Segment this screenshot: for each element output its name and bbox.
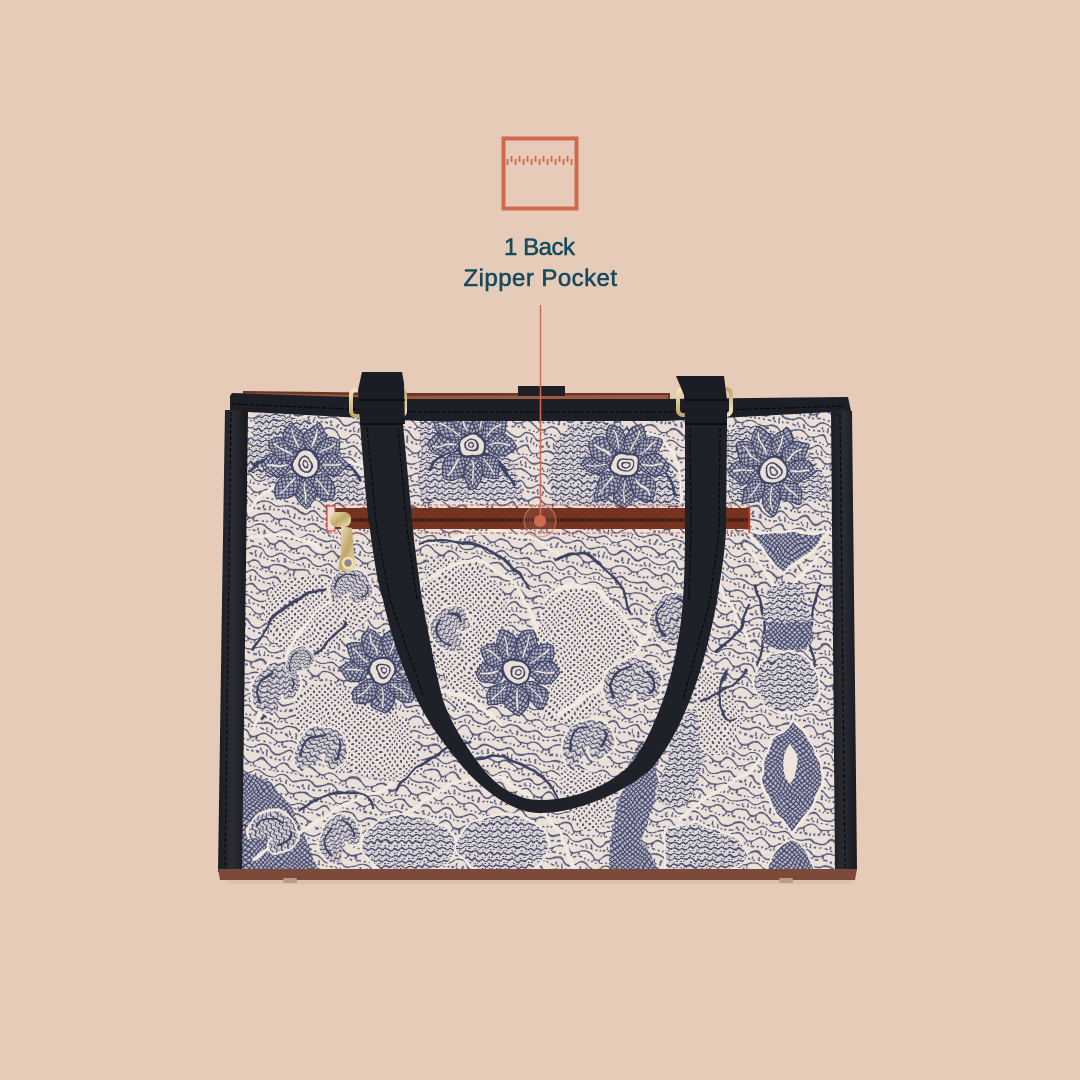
fabric: dense print regions [230,413,835,885]
fabric: light dotted regions [265,557,745,830]
right strap tab [676,376,727,424]
heading: 1 Back Zipper Pocket: 1 Back [504,234,576,261]
zipper teeth [330,518,750,522]
fabric: navy outline curves [250,449,820,810]
zipper cut outline [326,505,750,533]
heading: 1 Back Zipper Pocket [464,234,617,292]
brown top edge and centre tab [243,386,670,402]
strap stitching [367,428,720,700]
zipper tape [327,508,750,529]
handles [358,372,727,813]
metal feet [283,878,793,883]
right black side panel [831,411,857,870]
bag soft shadow [222,877,856,884]
fabric: cream outline curves [250,432,828,875]
side stitching [225,404,845,870]
zipper pull [330,512,356,573]
tote bag, back view [218,372,857,890]
fabric: scale bands at the base [360,815,750,876]
fabric: striped egg motif [754,622,820,713]
left strap tab [358,372,405,424]
fabric: triangle motif [748,532,828,622]
callout line and marker [524,305,556,537]
brown base edge [218,869,857,880]
icon: back zipper pocket [504,138,576,208]
zipper pocket [326,505,750,533]
infographic canvas [218,136,857,884]
left black side panel [218,410,248,873]
patterned fabric panel [242,412,835,869]
fabric: almond face motif [762,720,823,880]
U-shaped strap [360,424,727,813]
top black binding [230,393,851,421]
heading: 1 Back Zipper Pocket: Zipper Pocket [464,265,617,292]
buckle rings [351,389,731,416]
fabric: flower motifs [261,400,816,716]
fabric: paisley motifs [240,560,706,871]
